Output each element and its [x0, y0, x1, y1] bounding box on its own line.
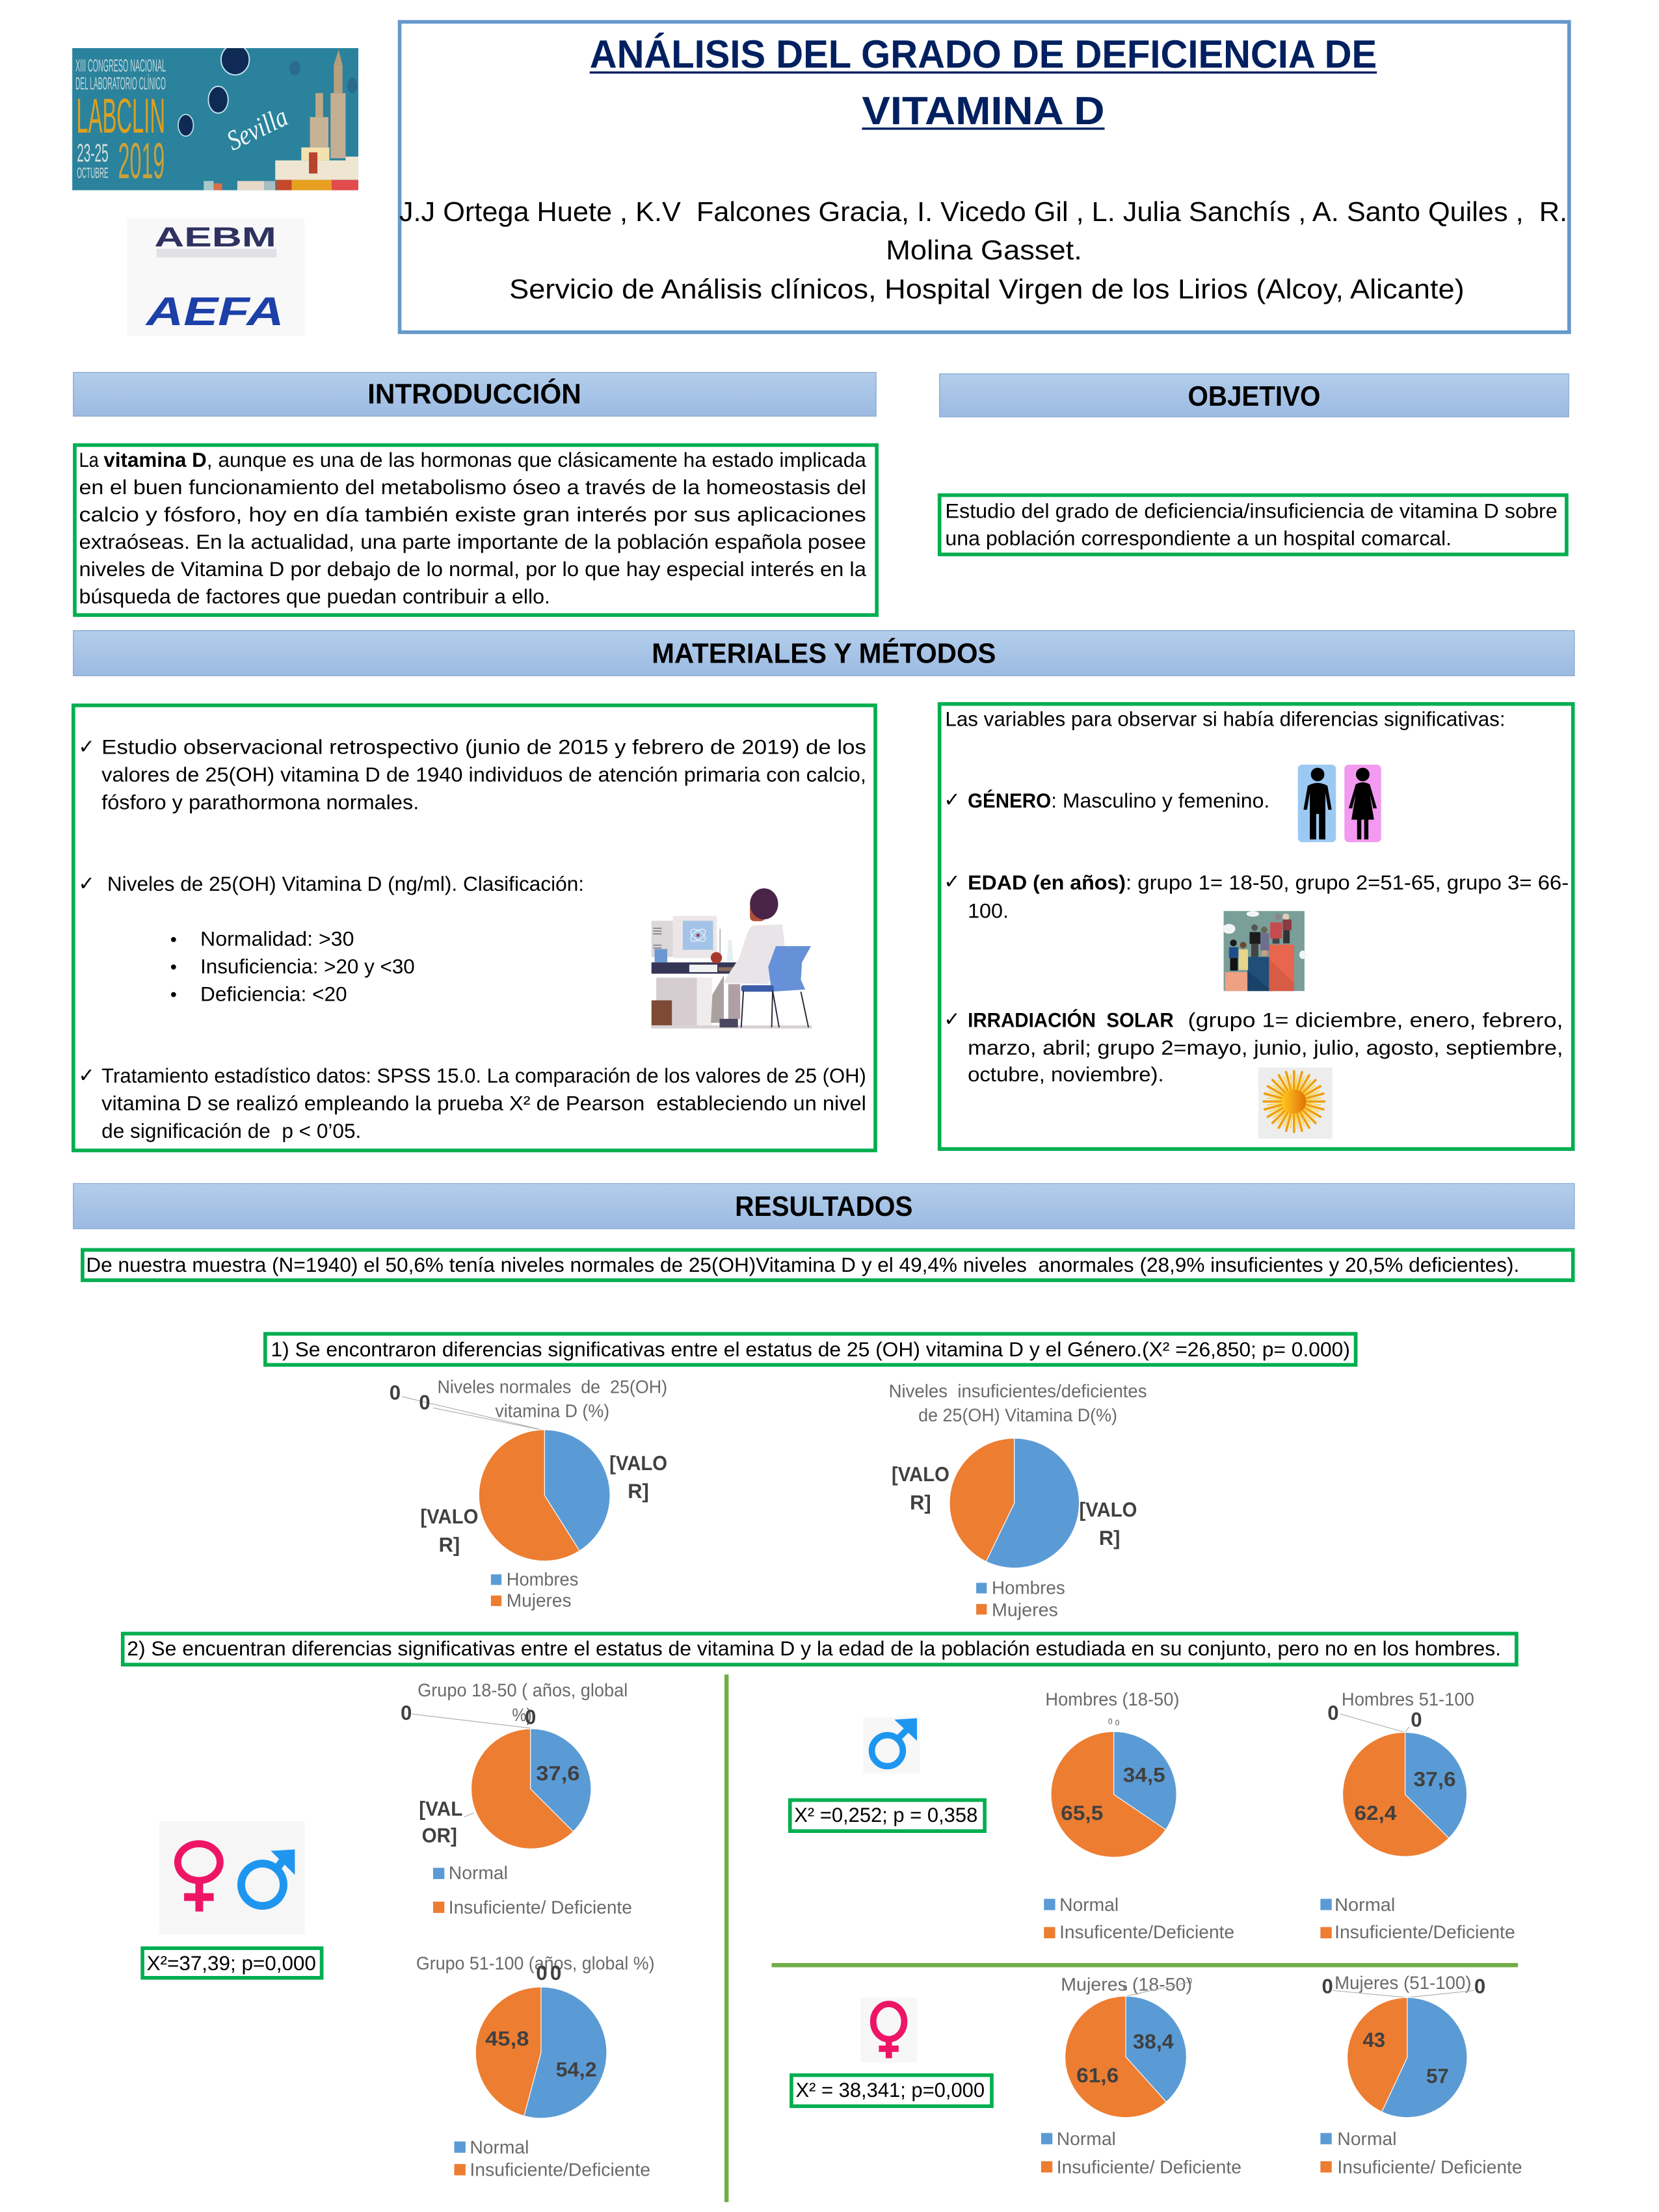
pie chart: hombres 18-50 — [1044, 1689, 1234, 1943]
panel: methods left: ✓ — [78, 737, 95, 759]
callout: chi-square global: X²=37,39; p=0,000 — [147, 1953, 316, 1976]
logo: LABCLIN congress: 23-25 — [77, 139, 109, 167]
authors and affiliation: Molina Gasset. — [886, 235, 1082, 267]
pie chart: niveles normales: vitamina D (%) — [495, 1400, 609, 1421]
panel: introducción: búsqueda de factores que puedan contribuir a ello. — [79, 586, 550, 609]
pie chart: niveles insuficientes/deficientes: Mujeres — [992, 1599, 1059, 1620]
callout: chi-square women — [791, 2075, 992, 2106]
logo: LABCLIN congress — [72, 44, 358, 191]
pie chart: niveles normales: R] — [628, 1481, 649, 1504]
pie chart: hombres 51-100: 37,6 — [1414, 1769, 1456, 1791]
authors and affiliation: Servicio de Análisis clínicos, Hospital Virgen de los Lirios (Alcoy, Alicante) — [509, 274, 1465, 306]
pie chart: niveles normales: [VALO — [609, 1453, 667, 1475]
panel: introducción: La — [79, 450, 99, 473]
panel: introducción: calcio y fósforo, hoy en día también existe gran interés por sus aplicaciones — [79, 505, 866, 527]
pie chart: grupo 51-100: Insuficiente/Deficiente — [470, 2159, 650, 2180]
authors and affiliation: J.J Ortega Huete , K.V Falcones Gracia, I. Vicedo Gil , L. Julia Sanchís , A. Santo Quiles , R. — [399, 197, 1567, 228]
heading: introducción — [73, 373, 876, 416]
icon: sun — [1258, 1068, 1333, 1139]
panel: methods left: Tratamiento estadístico datos: SPSS 15.0. La comparación de los valores de 25 (OH) — [101, 1066, 866, 1088]
heading: resultados — [73, 1183, 1574, 1229]
pie chart: grupo 18-50: %) — [512, 1704, 532, 1725]
pie chart: hombres 18-50: 0 — [1108, 1718, 1113, 1727]
logo: LABCLIN congress: OCTUBRE — [77, 165, 109, 182]
pie chart: hombres 18-50: 65,5 — [1061, 1803, 1103, 1826]
pie chart: niveles insuficientes/deficientes: R] — [910, 1492, 931, 1515]
pie chart: grupo 18-50: [VAL — [419, 1798, 463, 1821]
callout: finding 1: 1) Se encontraron diferencias significativas entre el estatus de 25 (OH) vitamina D y el Género.(X² =26,850; p= 0.000) — [271, 1339, 1350, 1362]
pie chart: mujeres 18-50: Mujeres (18-50) — [1061, 1973, 1192, 1995]
panel: variables: (grupo 1= diciembre, enero, febrero, — [1188, 1010, 1563, 1033]
callout: chi-square men: X² =0,252; p = 0,358 — [794, 1805, 977, 1828]
heading: materiales y métodos: MATERIALES Y MÉTODOS — [652, 638, 996, 670]
panel: variables: Las variables para observar si había diferencias significativas: — [945, 709, 1506, 731]
panel: variables: : Masculino y femenino. — [1051, 791, 1269, 813]
pie chart: grupo 18-50: 37,6 — [536, 1763, 580, 1786]
panel: variables: ✓ — [944, 1008, 961, 1031]
icon: scientist at computer — [652, 888, 812, 1029]
title — [590, 33, 1377, 133]
panel: objetivo: una población correspondiente a un hospital comarcal. — [945, 529, 1452, 551]
logo: LABCLIN congress: DEL LABORATORIO CLÍNICO — [75, 73, 166, 94]
logo: LABCLIN congress: LABCLIN — [76, 89, 165, 144]
pie chart: mujeres 18-50: 0 — [1123, 1985, 1127, 1994]
pie chart: hombres 51-100: Normal — [1334, 1894, 1396, 1915]
pie chart: hombres 18-50: 0 — [1115, 1720, 1119, 1728]
icon: venus and mars — [159, 1821, 305, 1934]
icon: mars — [864, 1717, 920, 1773]
heading: introducción: INTRODUCCIÓN — [367, 378, 581, 410]
panel: variables: EDAD (en años) — [968, 873, 1126, 895]
panel: objetivo — [940, 495, 1567, 555]
pie chart: mujeres 51-100: Insuficiente/ Deficiente — [1337, 2156, 1522, 2178]
panel: methods left: vitamina D se realizó empleando la prueba X² de Pearson estableciendo un nivel — [101, 1093, 866, 1116]
pie chart: niveles normales — [390, 1376, 667, 1611]
pie chart: grupo 51-100 — [416, 1953, 655, 2180]
pie chart: mujeres 51-100: Normal — [1337, 2128, 1397, 2149]
pie chart: niveles insuficientes/deficientes: [VALO — [892, 1464, 949, 1487]
pie chart: grupo 51-100: 54,2 — [556, 2060, 597, 2082]
logo: LABCLIN congress: Sevilla — [222, 101, 293, 157]
heading: resultados: RESULTADOS — [735, 1192, 912, 1223]
authors and affiliation — [399, 197, 1567, 306]
pie chart: grupo 18-50: OR] — [422, 1826, 457, 1848]
pie chart: niveles normales: Niveles normales de 25(OH) — [437, 1376, 667, 1397]
logo: AEBM and AEFA — [127, 218, 304, 336]
pie chart: hombres 51-100: Insuficiente/Deficiente — [1334, 1921, 1515, 1943]
callout: chi-square women: X² = 38,341; p=0,000 — [795, 2080, 985, 2103]
icon: man and woman — [1298, 765, 1381, 842]
title: ANÁLISIS DEL GRADO DE DEFICIENCIA DE — [590, 33, 1377, 76]
title: VITAMINA D — [862, 89, 1104, 133]
title box — [399, 22, 1569, 332]
panel: variables: ✓ — [944, 871, 961, 893]
pie chart: niveles normales: Mujeres — [507, 1590, 572, 1611]
pie chart: grupo 18-50 — [401, 1679, 632, 1918]
pie chart: niveles insuficientes/deficientes: [VALO — [1079, 1499, 1137, 1522]
panel: introducción: en el buen funcionamiento del metabolismo óseo a través de la homeostasis del — [79, 477, 866, 500]
icon: venus — [860, 1997, 917, 2062]
pie chart: mujeres 51-100: 0 — [1474, 1977, 1485, 1999]
pie chart: hombres 51-100: 62,4 — [1354, 1803, 1397, 1826]
pie chart: mujeres 51-100 — [1320, 1972, 1522, 2178]
pie chart: hombres 18-50: Hombres (18-50) — [1045, 1689, 1179, 1710]
pie chart: mujeres 51-100: 43 — [1362, 2030, 1385, 2053]
pie chart: grupo 18-50: Normal — [449, 1862, 508, 1883]
pie chart: hombres 51-100: Hombres 51-100 — [1342, 1689, 1474, 1710]
pie chart: niveles normales: [VALO — [420, 1507, 478, 1529]
panel: introducción: extraóseas. En la actualidad, una parte importante de la población española posee — [79, 532, 866, 555]
pie chart: grupo 18-50: Grupo 18-50 ( años, global — [418, 1679, 628, 1701]
panel: variables: ✓ — [944, 789, 961, 812]
pie chart: grupo 18-50: Insuficiente/ Deficiente — [449, 1897, 632, 1918]
panel: methods left: valores de 25(OH) vitamina D de 1940 individuos de atención primaria con calcio, — [101, 765, 866, 787]
pie chart: mujeres 18-50: 0 — [1188, 1978, 1192, 1986]
callout: finding 2: 2) Se encuentran diferencias significativas entre el estatus de vitamina D y la edad de la población estudiada en su conjunto, pero no en los hombres. — [127, 1639, 1501, 1661]
logo: AEBM and AEFA: AEFA — [144, 290, 284, 335]
pie chart: grupo 51-100: Normal — [470, 2137, 529, 2157]
panel: introducción: vitamina D — [103, 450, 207, 473]
pie chart: niveles normales: Hombres — [507, 1569, 579, 1590]
panel: methods left: Normalidad: >30 — [200, 929, 354, 951]
panel: variables: 100. — [968, 901, 1009, 923]
panel: variables: IRRADIACIÓN SOLAR — [968, 1008, 1175, 1033]
pie chart: niveles insuficientes/deficientes: de 25(OH) Vitamina D(%) — [918, 1404, 1117, 1425]
pie chart: niveles normales: R] — [439, 1535, 460, 1557]
panel: introducción: niveles de Vitamina D por debajo de lo normal, por lo que hay especial interés en la — [79, 559, 866, 582]
panel: methods left: fósforo y parathormona normales. — [101, 792, 419, 815]
panel: methods left: de significación de p < 0’05. — [101, 1121, 361, 1143]
pie chart: mujeres 18-50: Insuficiente/ Deficiente — [1057, 2156, 1241, 2178]
panel: methods left: ✓ — [78, 873, 95, 896]
pie chart: niveles insuficientes/deficientes — [889, 1380, 1148, 1620]
pie chart: grupo 51-100: 00 — [536, 1963, 561, 1986]
pie chart: mujeres 18-50: 38,4 — [1133, 2031, 1174, 2054]
pie chart: grupo 51-100: Grupo 51-100 (años, global %) — [416, 1953, 655, 1973]
panel: methods left: Estudio observacional retrospectivo (junio de 2015 y febrero de 2019) de los — [101, 737, 866, 759]
pie chart: hombres 51-100: 0 — [1411, 1710, 1422, 1732]
panel: methods left: Insuficiencia: >20 y <30 — [200, 956, 415, 979]
logo: LABCLIN congress: XIII CONGRESO NACIONAL — [75, 56, 166, 76]
panel: objetivo: Estudio del grado de deficiencia/insuficiencia de vitamina D sobre — [945, 501, 1558, 523]
pie chart: hombres 18-50: 34,5 — [1123, 1765, 1165, 1787]
pie chart: grupo 51-100: 45,8 — [485, 2029, 529, 2051]
pie chart: hombres 18-50: Normal — [1059, 1894, 1119, 1915]
pie chart: mujeres 18-50: 61,6 — [1076, 2065, 1119, 2088]
panel: variables: : grupo 1= 18-50, grupo 2=51-65, grupo 3= 66- — [1126, 873, 1569, 895]
pie chart: grupo 18-50: 0 — [525, 1707, 536, 1730]
heading: objetivo: OBJETIVO — [1188, 382, 1320, 413]
pie chart: niveles insuficientes/deficientes: R] — [1099, 1528, 1121, 1550]
pie chart: mujeres 51-100: 0 — [1322, 1977, 1333, 1999]
pie chart: hombres 51-100 — [1320, 1689, 1515, 1943]
pie chart: niveles insuficientes/deficientes: Hombres — [992, 1577, 1066, 1598]
panel: methods left: Deficiencia: <20 — [200, 984, 347, 1007]
panel: methods left: Niveles de 25(OH) Vitamina D (ng/ml). Clasificación: — [107, 874, 584, 897]
panel: introducción: , aunque es una de las hormonas que clásicamente ha estado implicada — [207, 450, 866, 473]
callout: sample summary: De nuestra muestra (N=1940) el 50,6% tenía niveles normales de 25(OH)Vitamina D y el 49,4% niveles anormales (28,9% insuficientes y 20,5% deficientes). — [86, 1255, 1519, 1278]
pie chart: niveles normales: 0 — [419, 1392, 431, 1415]
panel: variables: GÉNERO — [968, 789, 1051, 813]
logo: LABCLIN congress: 2019 — [118, 131, 165, 189]
panel: introducción — [75, 445, 877, 615]
pie chart: mujeres 51-100: Mujeres (51-100) — [1334, 1972, 1471, 1994]
panel: variables: octubre, noviembre). — [968, 1064, 1164, 1087]
panel: methods left: ✓ — [78, 1065, 95, 1088]
panel: variables: marzo, abril; grupo 2=mayo, junio, julio, agosto, septiembre, — [968, 1038, 1563, 1060]
panel: methods left — [73, 705, 875, 1150]
pie chart: mujeres 18-50: Normal — [1057, 2128, 1116, 2149]
pie chart: mujeres 18-50 — [1041, 1973, 1241, 2178]
pie chart: hombres 18-50: Insuficente/Deficiente — [1059, 1921, 1234, 1943]
pie chart: mujeres 51-100: 57 — [1426, 2066, 1449, 2088]
heading: materiales y métodos — [73, 631, 1574, 676]
heading: objetivo — [940, 374, 1569, 417]
callout: chi-square men — [790, 1800, 985, 1831]
icon: age groups family — [1223, 911, 1307, 991]
pie chart: hombres 51-100: 0 — [1327, 1703, 1339, 1725]
panel: variables — [940, 704, 1573, 1149]
pie chart: niveles insuficientes/deficientes: Niveles insuficientes/deficientes — [889, 1380, 1148, 1402]
pie chart: niveles normales: 0 — [390, 1382, 401, 1405]
logo: AEBM and AEFA: AEBM — [154, 222, 276, 254]
pie chart: grupo 18-50: 0 — [401, 1703, 412, 1725]
